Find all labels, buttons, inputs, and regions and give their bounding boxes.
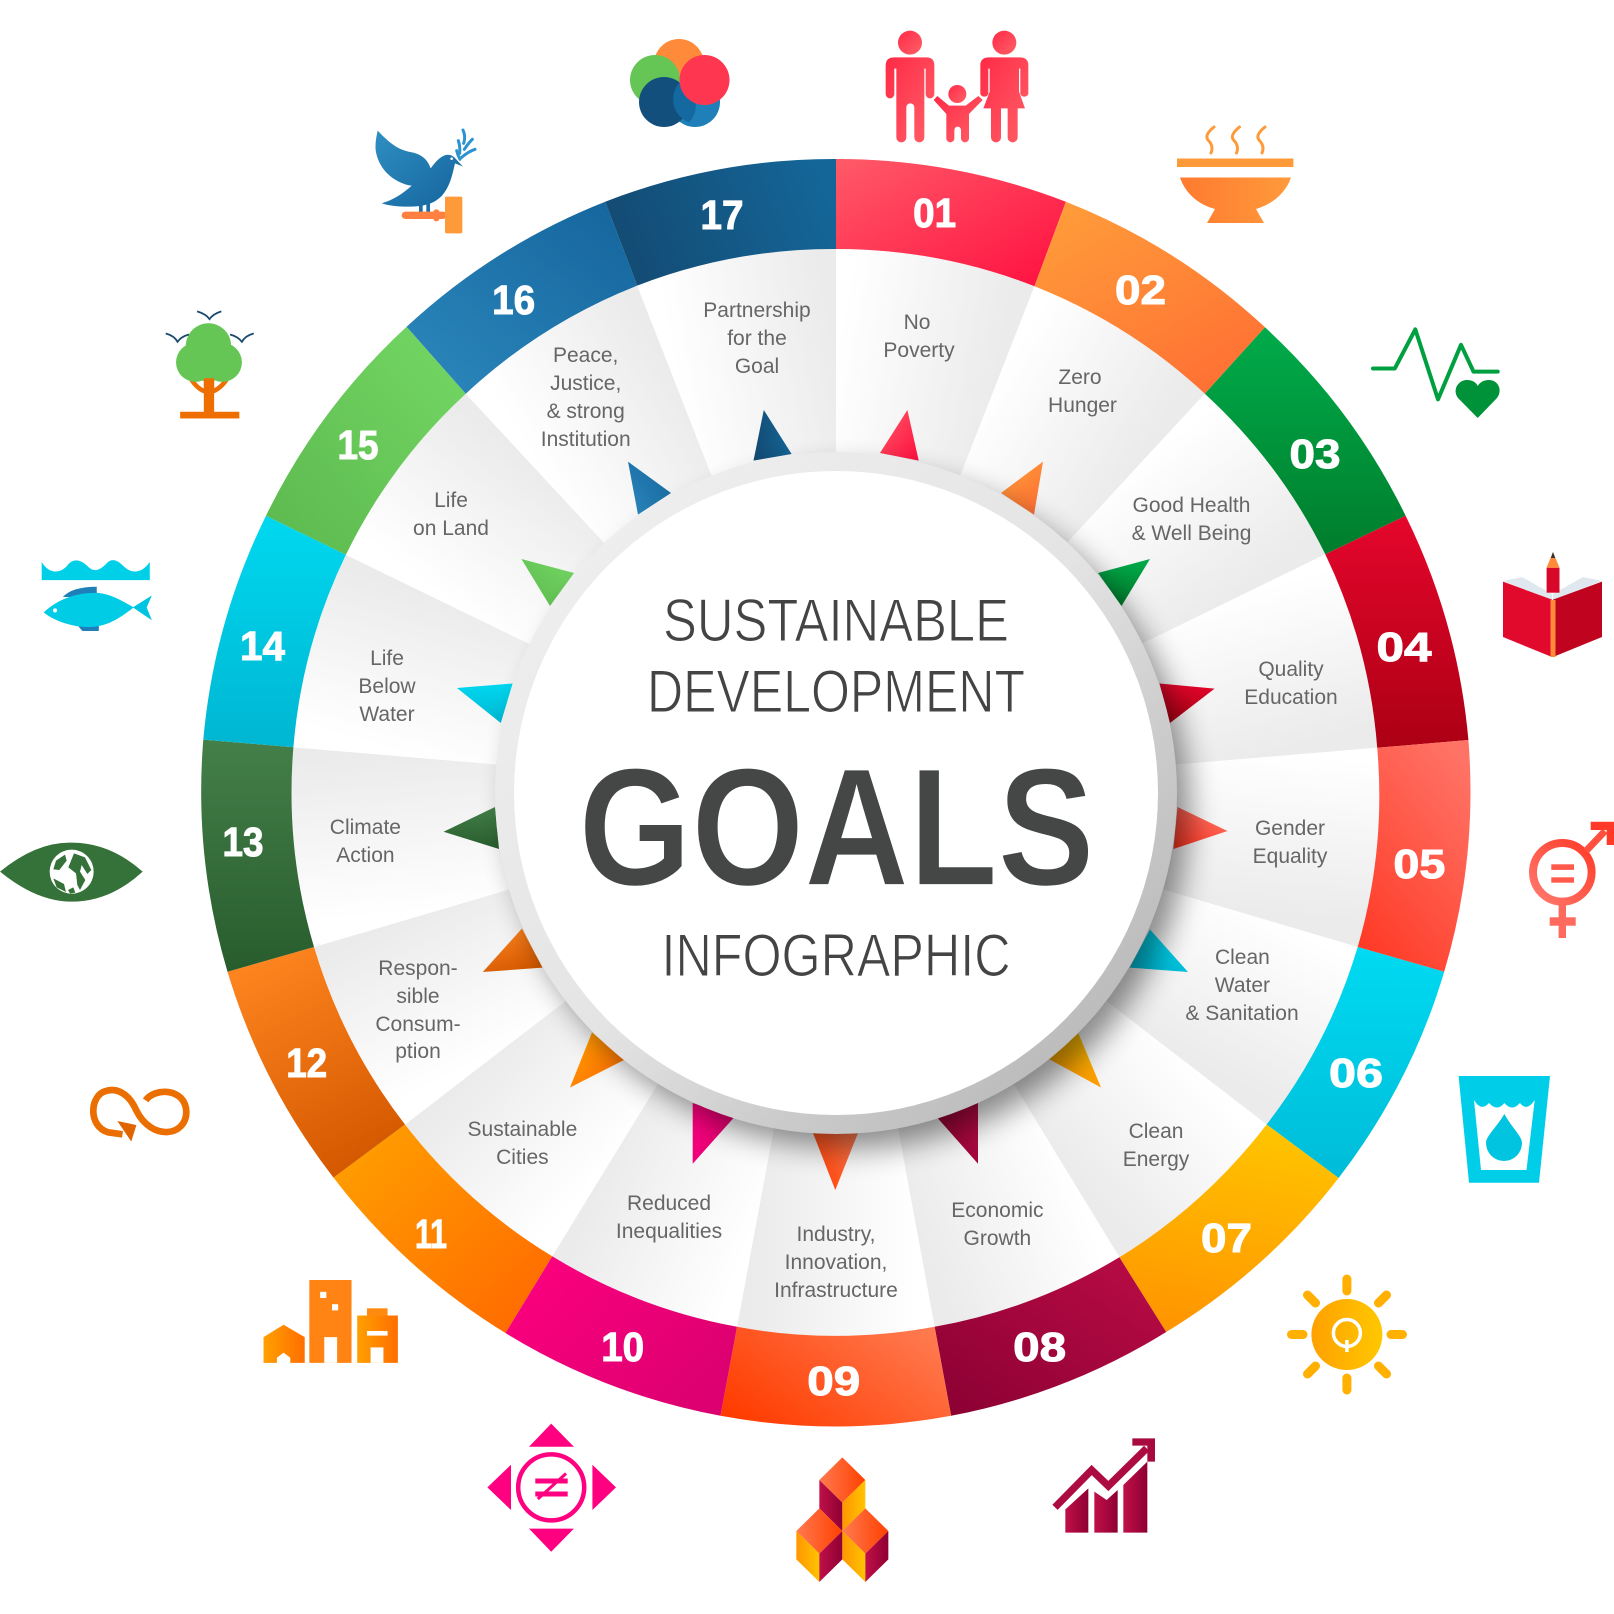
outer coloured ring segments (201, 159, 1470, 1426)
segment labels: Action (336, 844, 395, 867)
icon 11: city buildings (264, 1280, 398, 1363)
segment numbers: 09 (807, 1358, 860, 1404)
segment labels: Clean (1215, 946, 1270, 969)
segment labels: Below (358, 675, 416, 698)
icon 03: heart rate (1373, 329, 1500, 418)
segment labels: Consum- (375, 1013, 461, 1036)
icon 06: glass of water (1459, 1076, 1550, 1183)
hub shadow (511, 470, 1189, 1148)
segment labels: & Sanitation (1185, 1002, 1299, 1025)
segment labels: Justice, (550, 372, 621, 395)
segment labels: Infrastructure (774, 1279, 898, 1302)
segment labels: Peace, (553, 344, 618, 367)
white hub with title: INFOGRAPHIC (662, 922, 1010, 989)
icon 13: earth eye (0, 843, 143, 902)
segment labels (330, 299, 1338, 1302)
segment labels: Energy (1123, 1148, 1190, 1171)
icon 04: book and pencil (1503, 552, 1602, 657)
icon 14: fish and water (42, 560, 152, 631)
wedge backgrounds (292, 249, 1379, 1336)
segment labels: Reduced (627, 1192, 711, 1215)
segment labels: Sustainable (468, 1118, 577, 1141)
segment labels: Inequalities (616, 1220, 722, 1243)
white hub with title (514, 471, 1158, 1115)
segment numbers: 14 (240, 623, 285, 669)
segment labels: Industry, (797, 1223, 875, 1246)
icon 01: family (886, 31, 1028, 142)
segment labels: No (904, 311, 930, 334)
icon 05: gender equality (1533, 822, 1614, 938)
segment labels: sible (396, 985, 440, 1008)
segment labels: Institution (541, 428, 631, 451)
segment numbers: 05 (1393, 841, 1445, 887)
segment labels: Quality (1258, 658, 1324, 681)
segment numbers: 12 (286, 1040, 327, 1086)
icon 02: soup bowl (1177, 127, 1293, 223)
icon 16: dove and gavel (375, 130, 475, 233)
segment numbers: 02 (1115, 267, 1166, 313)
segment labels: Water (359, 703, 415, 726)
segment numbers (222, 190, 1445, 1404)
white hub with title: SUSTAINABLE (663, 587, 1009, 654)
segment numbers: 07 (1201, 1215, 1252, 1261)
segment numbers: 17 (700, 192, 744, 238)
segment numbers: 15 (338, 422, 378, 468)
segment numbers: 11 (415, 1211, 447, 1257)
segment numbers: 03 (1290, 431, 1340, 477)
segment numbers: 16 (492, 277, 535, 323)
segment labels: Gender (1255, 817, 1325, 840)
segment labels: Cities (496, 1146, 549, 1169)
segment labels: Water (1215, 974, 1270, 997)
icon 15: tree and birds (166, 311, 254, 418)
segment labels: on Land (413, 517, 489, 540)
white hub with title: DEVELOPMENT (647, 658, 1025, 725)
segment labels: Life (434, 489, 468, 512)
segment labels: Growth (964, 1227, 1031, 1250)
segment labels: Zero (1058, 366, 1102, 389)
segment labels: Goal (735, 355, 779, 378)
goals wheel (201, 159, 1470, 1426)
white hub with title: GOALS (578, 733, 1094, 921)
segment labels: Economic (951, 1199, 1044, 1222)
icon 12: infinity loop (93, 1090, 186, 1142)
segment labels: ption (395, 1040, 441, 1063)
segment labels: Poverty (883, 339, 955, 362)
segment labels: Hunger (1048, 394, 1117, 417)
segment numbers: 10 (601, 1324, 644, 1370)
segment labels: & Well Being (1132, 522, 1251, 545)
segment numbers: 04 (1376, 624, 1432, 670)
segment labels: Partnership (703, 299, 811, 322)
icon 08: growth chart (1055, 1438, 1155, 1533)
segment labels: Good Health (1133, 494, 1250, 517)
pointer triangles (444, 410, 1228, 1190)
segment labels: Education (1244, 686, 1338, 709)
icon 09: stacked cubes (796, 1457, 888, 1582)
segment labels: for the (727, 327, 787, 350)
segment labels: Clean (1129, 1120, 1183, 1143)
segment labels: Respon- (378, 957, 458, 980)
segment numbers: 06 (1329, 1050, 1383, 1096)
segment labels: Life (370, 647, 404, 670)
segment labels: & strong (547, 400, 625, 423)
segment numbers: 08 (1013, 1324, 1066, 1370)
icon 10: reduced inequalities (487, 1424, 616, 1552)
icon 07: sun (1292, 1279, 1402, 1390)
icon 17: partnership circles (630, 39, 730, 127)
segment labels: Innovation, (785, 1251, 887, 1274)
segment numbers: 01 (913, 190, 956, 236)
segment labels: Equality (1253, 845, 1328, 868)
segment numbers: 13 (222, 819, 264, 865)
hub rim (495, 452, 1177, 1134)
segment labels: Climate (330, 816, 401, 839)
